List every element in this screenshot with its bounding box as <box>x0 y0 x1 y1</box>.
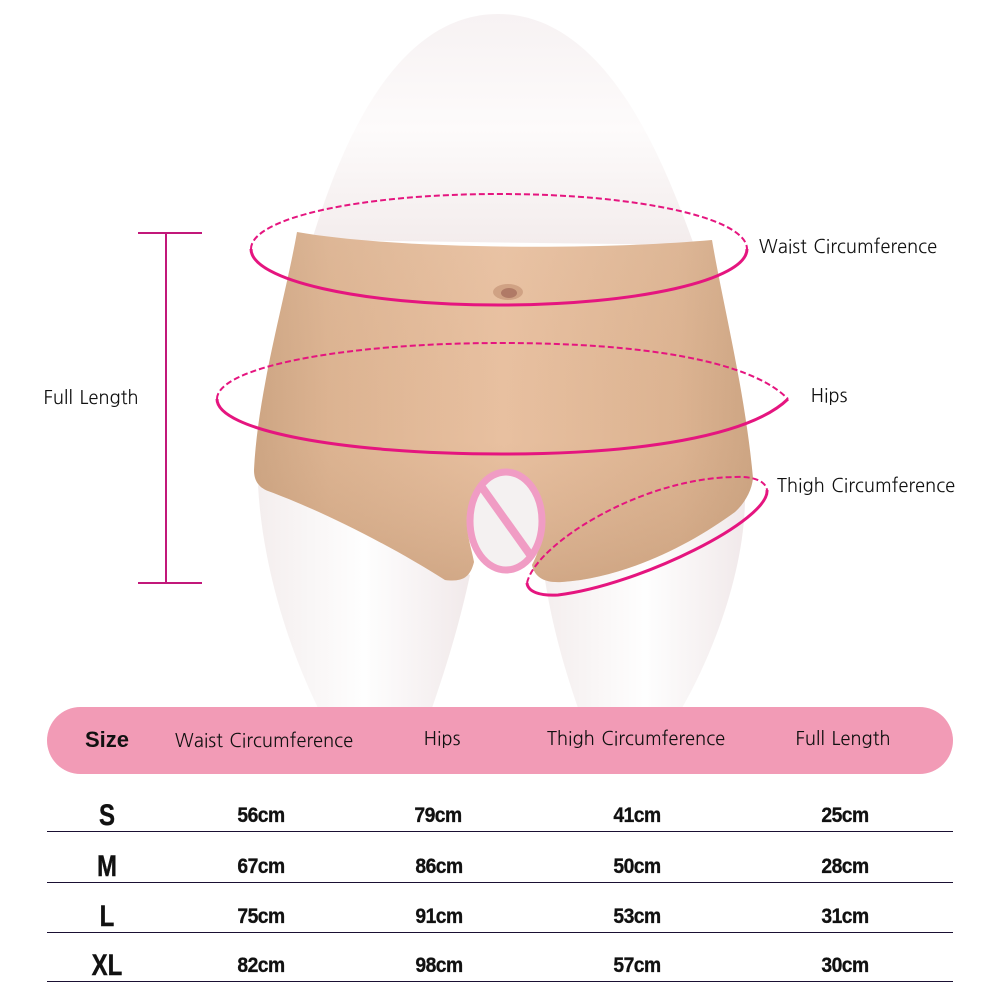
row XL <box>92 949 869 982</box>
label: waist: Waist Circumference <box>759 237 937 256</box>
label: hips: Hips <box>811 386 847 405</box>
row M: 50cm <box>613 855 661 878</box>
row S: S <box>99 799 115 832</box>
row S: 79cm <box>414 804 462 827</box>
waist ring <box>251 194 747 305</box>
label: full length: Full Length <box>44 388 138 407</box>
row M: 86cm <box>415 855 463 878</box>
header: waist: Waist Circumference <box>175 731 353 750</box>
row L: 31cm <box>821 905 869 928</box>
header: hips: Hips <box>424 729 460 748</box>
thigh ring <box>527 477 767 595</box>
row XL: 57cm <box>613 954 661 977</box>
row M: 67cm <box>237 855 285 878</box>
full length bracket <box>138 233 202 583</box>
row L <box>100 900 869 933</box>
censor mark <box>470 472 542 570</box>
mannequin left leg <box>258 485 470 708</box>
hips ring <box>217 343 788 454</box>
row M: 28cm <box>821 855 869 878</box>
shorts garment <box>254 232 753 582</box>
header: size: Size <box>85 727 129 752</box>
row S: 25cm <box>821 804 869 827</box>
row XL: 82cm <box>237 954 285 977</box>
mannequin right leg <box>545 500 745 708</box>
row XL: 98cm <box>415 954 463 977</box>
row M <box>97 850 869 883</box>
header: thigh: Thigh Circumference <box>547 729 725 748</box>
header: length: Full Length <box>796 729 890 748</box>
row XL: XL <box>92 949 122 982</box>
label: thigh: Thigh Circumference <box>777 476 955 495</box>
row L: L <box>100 900 114 933</box>
product diagram <box>138 14 789 707</box>
row S: 41cm <box>613 804 661 827</box>
row S: 56cm <box>237 804 285 827</box>
row M: M <box>97 850 117 883</box>
table header <box>47 707 953 774</box>
row L: 75cm <box>237 905 285 928</box>
row L: 91cm <box>415 905 463 928</box>
navel <box>493 284 523 300</box>
row XL: 30cm <box>821 954 869 977</box>
mannequin torso <box>312 14 694 245</box>
row L: 53cm <box>613 905 661 928</box>
row S <box>99 799 869 832</box>
